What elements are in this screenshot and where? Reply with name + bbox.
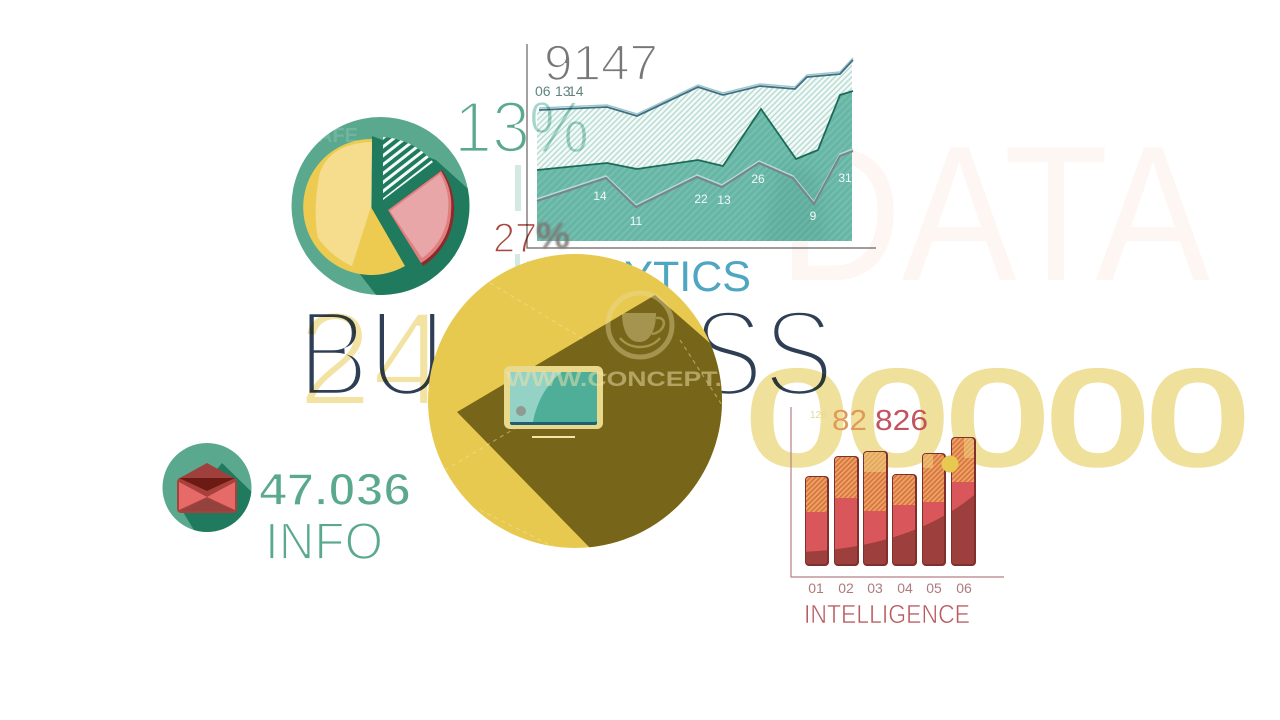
bar category labels: 01 [808,580,824,596]
yellow number showing through bars [864,438,974,472]
chart axes [527,44,876,248]
yellow pie slice [303,139,405,275]
label: INFO: INFO [265,513,383,571]
number 9147: 9147 [544,35,658,91]
bar outlines [805,437,976,566]
chart value labels: 14 [593,189,607,203]
bar fills [806,438,974,564]
monitor frame [504,366,603,429]
bar category labels: 05 [926,580,942,596]
badge circle [162,443,252,532]
bar category labels [808,580,972,596]
chart value labels: 11 [630,214,643,228]
pie long shadow [360,136,470,295]
percentage 27%: 27 [493,214,537,261]
envelope sides [179,482,207,510]
hatched bar tops [806,477,827,512]
pink pie slice rim [388,170,454,266]
yellow marker dot [942,456,958,472]
watermark: coffee cup [608,293,672,357]
heading: ANALYTICS: ANALYTICS [515,253,751,301]
top line highlight [539,58,853,114]
large yellow number: 00000 [747,344,1248,493]
envelope body [177,478,237,513]
percentage 27%: % [536,215,570,256]
pale highlight slice [316,142,372,266]
middle teal area [537,91,852,241]
pink pie slice edge [388,171,451,263]
bar values: 82 [832,405,867,437]
chart value labels: 26 [751,172,765,186]
chart value labels: 22 [694,192,708,206]
top line [539,60,853,116]
percentage 13% [454,88,589,168]
stat: 47.036: 47.036 [259,464,411,515]
hatched pie slice [383,137,433,200]
envelope flap [178,463,236,479]
label: INTELLIGENCE: INTELLIGENCE [804,599,970,629]
bar values: 826 [875,405,928,437]
panel: bar chart [791,405,1004,596]
small overlapping numbers: 06 [535,83,551,99]
bar category labels: 06 [956,580,972,596]
chart value labels [593,171,852,228]
icon: central monitor badge [428,254,735,560]
background word: DATA: DATA [778,105,1210,321]
pink pie slice face [390,174,448,258]
pie background circle [292,117,470,295]
infographic canvas [162,44,1244,624]
lower line [537,151,853,207]
lower bar shadow [806,495,974,564]
bar category labels: 03 [867,580,883,596]
faded teal letter [515,165,521,211]
monitor screen [510,372,597,425]
icon: pie chart [292,117,480,300]
bar values: 126 [810,410,827,421]
badge shadow [184,463,252,532]
bar category labels: 04 [897,580,913,596]
dashed decoration lines [445,283,722,550]
bar values [810,405,928,437]
lower line highlight [537,149,853,205]
bar category labels: 02 [838,580,854,596]
chart value labels: 9 [810,209,817,223]
percentage 27% [493,214,570,261]
chart shadow band [768,172,822,241]
faded teal letter stub [515,254,520,270]
panel: area chart [527,44,876,250]
watermark: site text: WWW.CONCEPT. [506,368,722,391]
small overlapping numbers: 14 [568,83,584,99]
upper hatched area [537,61,852,241]
watermark fragment: AFE [318,125,358,147]
icon: envelope badge [162,443,252,532]
faded yellow number 24: 24 [298,285,446,434]
monitor stand [532,436,575,438]
chart value labels: 31 [838,171,852,185]
small overlapping numbers: 13 [555,83,571,99]
small overlapping numbers [535,83,584,99]
long shadow [457,295,735,560]
bar chart axes [791,407,1004,577]
percentage 13%: 13 [454,88,530,168]
heading: BUSINESS: BUSINESS [298,286,834,423]
chart value labels: 13 [717,193,731,207]
percentage 13%: % [529,88,589,168]
middle line [537,91,853,170]
yellow circle [428,254,722,548]
